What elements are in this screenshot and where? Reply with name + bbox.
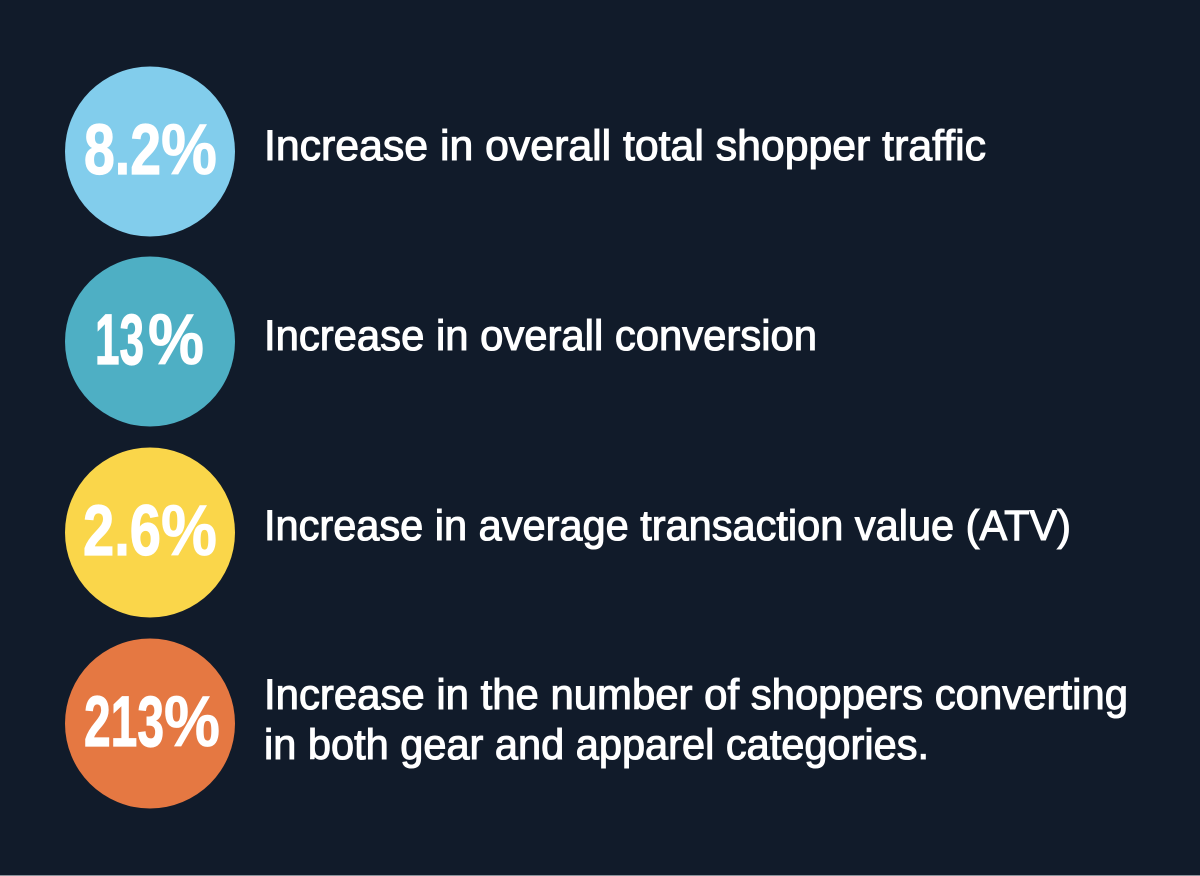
stat row: average transaction value: [65, 448, 1071, 618]
circle badge: 8.2%: [65, 66, 235, 236]
circle badge: 2.6%: %: [161, 492, 217, 571]
label: gear and apparel shoppers: Increase in the number of shoppers converting: [264, 671, 1128, 719]
stat row: shopper traffic: [65, 66, 986, 236]
stat row: gear and apparel shoppers: [65, 638, 1128, 808]
circle badge: 2.6%: [65, 448, 235, 618]
circle badge: 13%: 13: [95, 301, 144, 380]
circle badge: 13%: %: [148, 301, 204, 380]
label: gear and apparel shoppers: in both gear and apparel categories.: [264, 721, 929, 769]
circle badge: 8.2%: %: [161, 111, 217, 190]
label: shopper traffic: Increase in overall total shopper traffic: [264, 122, 986, 170]
circle badge: 13%: [65, 256, 235, 426]
label: gear and apparel shoppers: [264, 671, 1128, 769]
circle badge: 2.6%: 2.6: [83, 492, 161, 571]
stat row: conversion: [65, 256, 817, 426]
circle badge: 8.2%: 8.2: [84, 111, 161, 190]
label: conversion: Increase in overall conversion: [264, 312, 817, 360]
circle badge: 213%: 213: [84, 683, 164, 762]
circle badge: 213%: %: [164, 683, 220, 762]
label: average transaction value: Increase in average transaction value (ATV): [264, 502, 1071, 550]
circle badge: 213%: [65, 638, 235, 808]
